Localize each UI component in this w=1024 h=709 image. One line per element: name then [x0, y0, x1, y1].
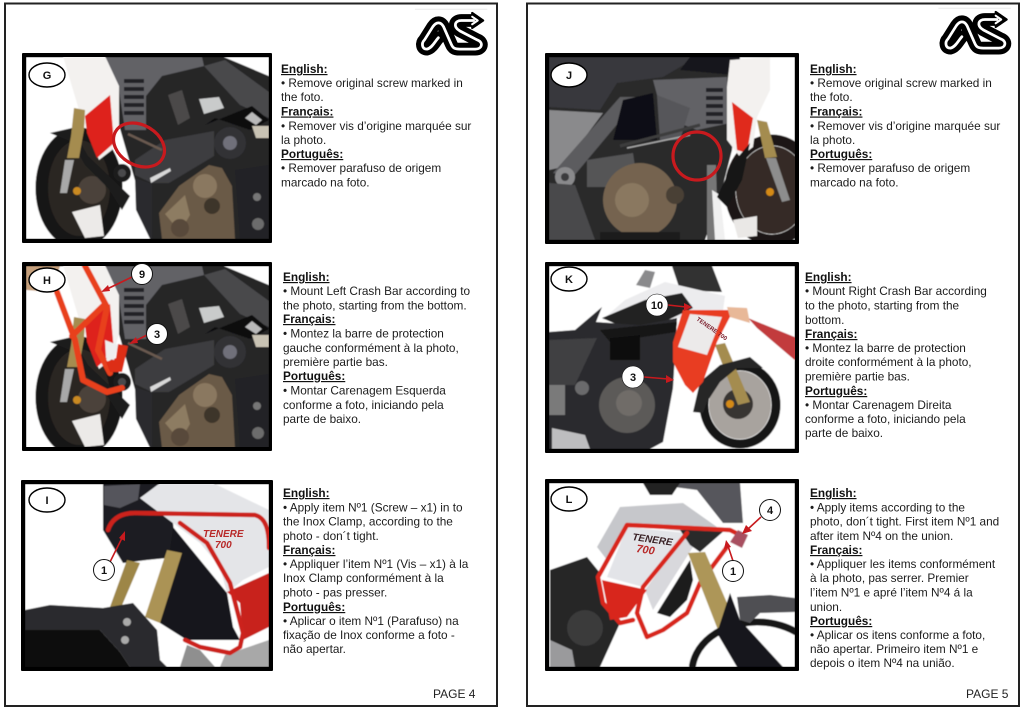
text block H: Português: — [283, 369, 345, 383]
text block I: fixação de Inox conforme a foto - — [283, 628, 455, 642]
callout 3 with arrow: 3 — [630, 372, 636, 384]
step label L — [551, 487, 587, 511]
tank decal — [632, 532, 674, 558]
text block G: • Remover vis d’origine marquée sur — [281, 119, 471, 133]
text block H: • Montar Carenagem Esquerda — [283, 384, 446, 398]
tank decal: 700 — [636, 543, 656, 558]
text block K: Português: — [805, 384, 867, 398]
text block L — [810, 486, 999, 670]
decal on crash bar panel: TENERE 700 — [695, 317, 728, 343]
text block G: • Remove original screw marked in — [281, 76, 463, 90]
step label G — [29, 63, 65, 87]
tank decal: 700 — [215, 540, 232, 551]
text block K: • Montez la barre de protection — [805, 341, 966, 355]
text block H: • Mount Left Crash Bar according to — [283, 284, 471, 298]
text block J: Français: — [810, 104, 862, 118]
text block I: • Apply item Nº1 (Screw – x1) in to — [283, 500, 463, 514]
text block J: • Remove original screw marked in — [810, 76, 992, 90]
step label J — [551, 63, 587, 87]
text block J: la photo. — [810, 133, 855, 147]
text block L: l’item Nº1 e apré l’item Nº4 á la — [810, 586, 973, 600]
page number 5: PAGE 5 — [966, 687, 1009, 701]
text block K — [805, 270, 987, 440]
text block L: after item Nº4 on the union. — [810, 529, 953, 543]
text block K: première partie bas. — [805, 370, 910, 384]
callout 1 with arrow: 1 — [101, 565, 107, 577]
callout 1 with arrow — [722, 540, 744, 582]
text block H: • Montez la barre de protection — [283, 326, 444, 340]
text block I: English: — [283, 486, 330, 500]
photo I: front of crash bar with item 1 — [21, 480, 273, 671]
text block L: union. — [810, 600, 842, 614]
panel: page 5 — [527, 4, 1019, 709]
logo: AS, page 5 — [938, 8, 1011, 48]
text block K: parte de baixo. — [805, 426, 883, 440]
tank decal: TENERE — [203, 529, 244, 540]
text block G: Français: — [281, 104, 333, 118]
text block I: Français: — [283, 543, 335, 557]
step label I — [29, 488, 65, 512]
step label K: K — [565, 274, 573, 286]
callout 4 with arrow: 4 — [767, 505, 774, 517]
text block K: droite conformément à la photo, — [805, 355, 972, 369]
text block J: • Remover parafuso de origem — [810, 161, 970, 175]
text block H: première partie bas. — [283, 355, 388, 369]
text block L: Português: — [810, 614, 872, 628]
text block L: à la photo, pas serrer. Premier — [810, 571, 969, 585]
callout 9 with arrow — [101, 264, 152, 292]
text block G: marcado na foto. — [281, 176, 370, 190]
text block I: photo - pas presser. — [283, 586, 387, 600]
panel: page 4 — [5, 4, 497, 706]
page number 4: PAGE 4 — [433, 687, 476, 701]
callout 4 with arrow — [742, 500, 780, 534]
text block I: photo - don´t tight. — [283, 529, 379, 543]
red circle marking screw — [673, 132, 721, 180]
text block H: the photo, starting from the bottom. — [283, 298, 467, 312]
tank decal: TENERE — [632, 532, 674, 549]
text block K: • Montar Carenagem Direita — [805, 398, 952, 412]
text block L: Français: — [810, 543, 862, 557]
text block J: marcado na foto. — [810, 176, 899, 190]
text block G — [281, 62, 471, 190]
text block J: • Remover vis d’origine marquée sur — [810, 119, 1000, 133]
text block J: the foto. — [810, 90, 853, 104]
tank decal — [203, 529, 244, 551]
text block I — [283, 486, 469, 656]
text block K: bottom. — [805, 313, 844, 327]
text block H: English: — [283, 270, 330, 284]
step label L: L — [566, 494, 573, 506]
text block L: • Aplicar os itens conforme a foto, — [810, 628, 985, 642]
text block J — [810, 62, 1000, 190]
text block I: não apertar. — [283, 642, 346, 656]
photo K: right crash bar being fitted — [545, 262, 799, 453]
text block I: • Appliquer l’item Nº1 (Vis – x1) à la — [283, 557, 469, 571]
text block K: Français: — [805, 327, 857, 341]
callout 10 with arrow — [646, 294, 692, 316]
text block H: parte de baixo. — [283, 412, 361, 426]
text block K: English: — [805, 270, 852, 284]
callout 3 with arrow — [129, 324, 168, 344]
callout 1 with arrow: 1 — [730, 566, 736, 578]
callout 10 with arrow: 10 — [651, 300, 663, 312]
logo: AS, page 4 — [415, 9, 487, 49]
photo H: left crash bar mounted — [22, 262, 272, 451]
text block J: English: — [810, 62, 857, 76]
photo L: crash bar union with items 1 and 4 — [545, 479, 799, 671]
photo J: right side of motorcycle — [545, 53, 814, 244]
text block G: • Remover parafuso de origem — [281, 161, 441, 175]
text block G: la photo. — [281, 133, 326, 147]
step label K — [551, 267, 587, 291]
text block I: the Inox Clamp, according to the — [283, 514, 453, 528]
callout 9 with arrow: 9 — [139, 269, 145, 281]
callout 1 with arrow — [94, 531, 125, 580]
text block J: Português: — [810, 147, 872, 161]
text block H — [283, 270, 471, 426]
step label I: I — [45, 495, 49, 507]
text block I: Português: — [283, 600, 345, 614]
callout 3 with arrow: 3 — [154, 329, 160, 341]
text block H: Français: — [283, 312, 335, 326]
text block K: • Mount Right Crash Bar according — [805, 284, 987, 298]
text block L: • Appliquer les items conformément — [810, 557, 996, 571]
text block G: English: — [281, 62, 328, 76]
photo G: frame with left side of motorcycle — [22, 53, 272, 243]
text block L: English: — [810, 486, 857, 500]
step label H: H — [43, 275, 51, 287]
red circle marking screw — [106, 114, 172, 176]
text block L: não apertar. Primeiro item Nº1 e — [810, 642, 979, 656]
text block L: depois o item Nº4 na união. — [810, 656, 955, 670]
text block H: gauche conformément à la photo, — [283, 341, 459, 355]
text block K: conforme a foto, iniciando pela — [805, 412, 966, 426]
text block L: photo, don´t tight. First item Nº1 and — [810, 514, 999, 528]
step label J: J — [566, 70, 572, 82]
step label H — [29, 268, 65, 292]
text block L: • Apply items according to the — [810, 500, 965, 514]
callout 3 with arrow — [622, 366, 674, 388]
step label G: G — [43, 70, 51, 82]
text block G: Português: — [281, 147, 343, 161]
text block I: Inox Clamp conformément à la — [283, 571, 444, 585]
text block H: conforme a foto, iniciando pela — [283, 398, 444, 412]
text block K: to the photo, starting from the — [805, 298, 960, 312]
text block I: • Aplicar o item Nº1 (Parafuso) na — [283, 614, 459, 628]
text block G: the foto. — [281, 90, 324, 104]
